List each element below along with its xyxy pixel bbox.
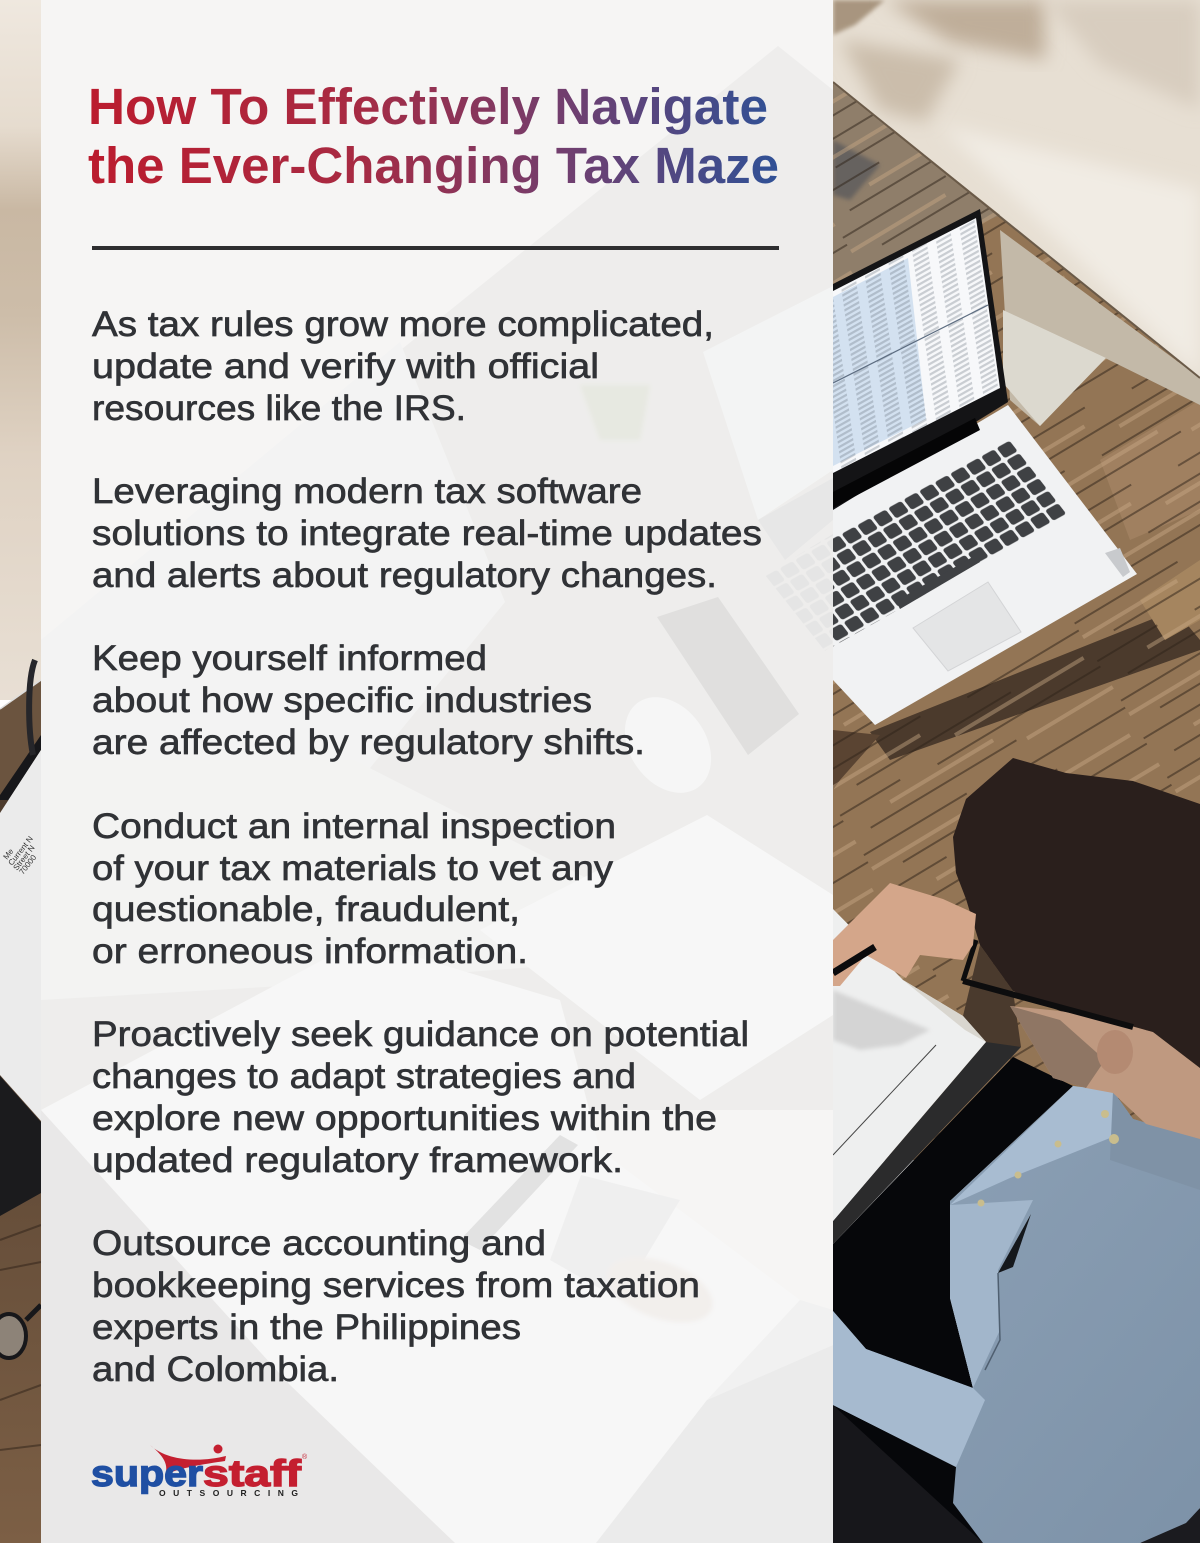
background photo: left strip of floor and desk: 70000 [17,853,39,876]
tip 4: internal inspection: or erroneous information. [92,932,528,971]
logo: SuperStaff Outsourcing [91,1444,308,1498]
tip 1: official resources: update and verify with official [92,347,599,386]
man at desk: head [953,758,1200,1139]
tip 1: official resources: resources like the IRS. [92,389,466,428]
tip 5: proactive guidance [92,1015,749,1180]
title: the Ever-Changing Tax Maze [88,137,779,194]
title [88,78,779,194]
tip 6: outsource: experts in the Philippines [92,1308,521,1347]
tip 1: official resources [92,305,714,428]
tip 4: internal inspection: of your tax materials to vet any [92,849,614,888]
tip 6: outsource: Outsource accounting and [92,1224,546,1263]
tip 2: tax software: and alerts about regulatory changes. [92,556,717,595]
background photo: left strip of floor and desk: Street N [11,843,37,872]
background photo: left strip of floor and desk: Me [1,846,16,861]
background photo: left strip of floor and desk: Current N [6,834,35,867]
logo: SuperStaff Outsourcing: ® [302,1453,308,1461]
tip 2: tax software [92,472,762,595]
tip 3: industries [92,639,645,762]
tip 6: outsource: bookkeeping services from taxation [92,1266,700,1305]
tip 6: outsource: and Colombia. [92,1350,339,1389]
panel: translucent white column [41,0,833,1543]
tip 2: tax software: Leveraging modern tax software [92,472,642,511]
background photo: left strip of floor and desk [0,0,41,1543]
tip 5: proactive guidance: updated regulatory framework. [92,1141,623,1180]
laptop [765,209,1137,725]
man at desk: blue shirt [833,1086,1200,1543]
tip 4: internal inspection: Conduct an internal inspection [92,807,616,846]
man at desk: hand holding pen [833,883,976,986]
tip 4: internal inspection [92,807,616,971]
logo: SuperStaff Outsourcing: OUTSOURCING [159,1488,298,1498]
tip 1: official resources: As tax rules grow more complicated, [92,305,714,344]
background photo: floor top right [833,0,1200,400]
title: How To Effectively Navigate [88,78,768,135]
tip 5: proactive guidance: Proactively seek guidance on potential [92,1015,749,1054]
tip 6: outsource [92,1224,700,1389]
tip 4: internal inspection: questionable, fraudulent, [92,890,520,929]
man at desk: dark trousers and chair [833,1057,1200,1543]
background photo: wooden desk [833,82,1200,1160]
tip 3: industries: are affected by regulatory shifts. [92,723,645,762]
tip 3: industries: about how specific industries [92,681,592,720]
logo: SuperStaff Outsourcing: super [91,1453,203,1494]
logo: SuperStaff Outsourcing: staff [203,1453,302,1494]
man at desk: clipboard and document [833,909,1021,1244]
tip 2: tax software: solutions to integrate real-time updates [92,514,762,553]
tip 5: proactive guidance: changes to adapt strategies and [92,1057,636,1096]
tip 5: proactive guidance: explore new opportunities within the [92,1099,717,1138]
tip 3: industries: Keep yourself informed [92,639,487,678]
